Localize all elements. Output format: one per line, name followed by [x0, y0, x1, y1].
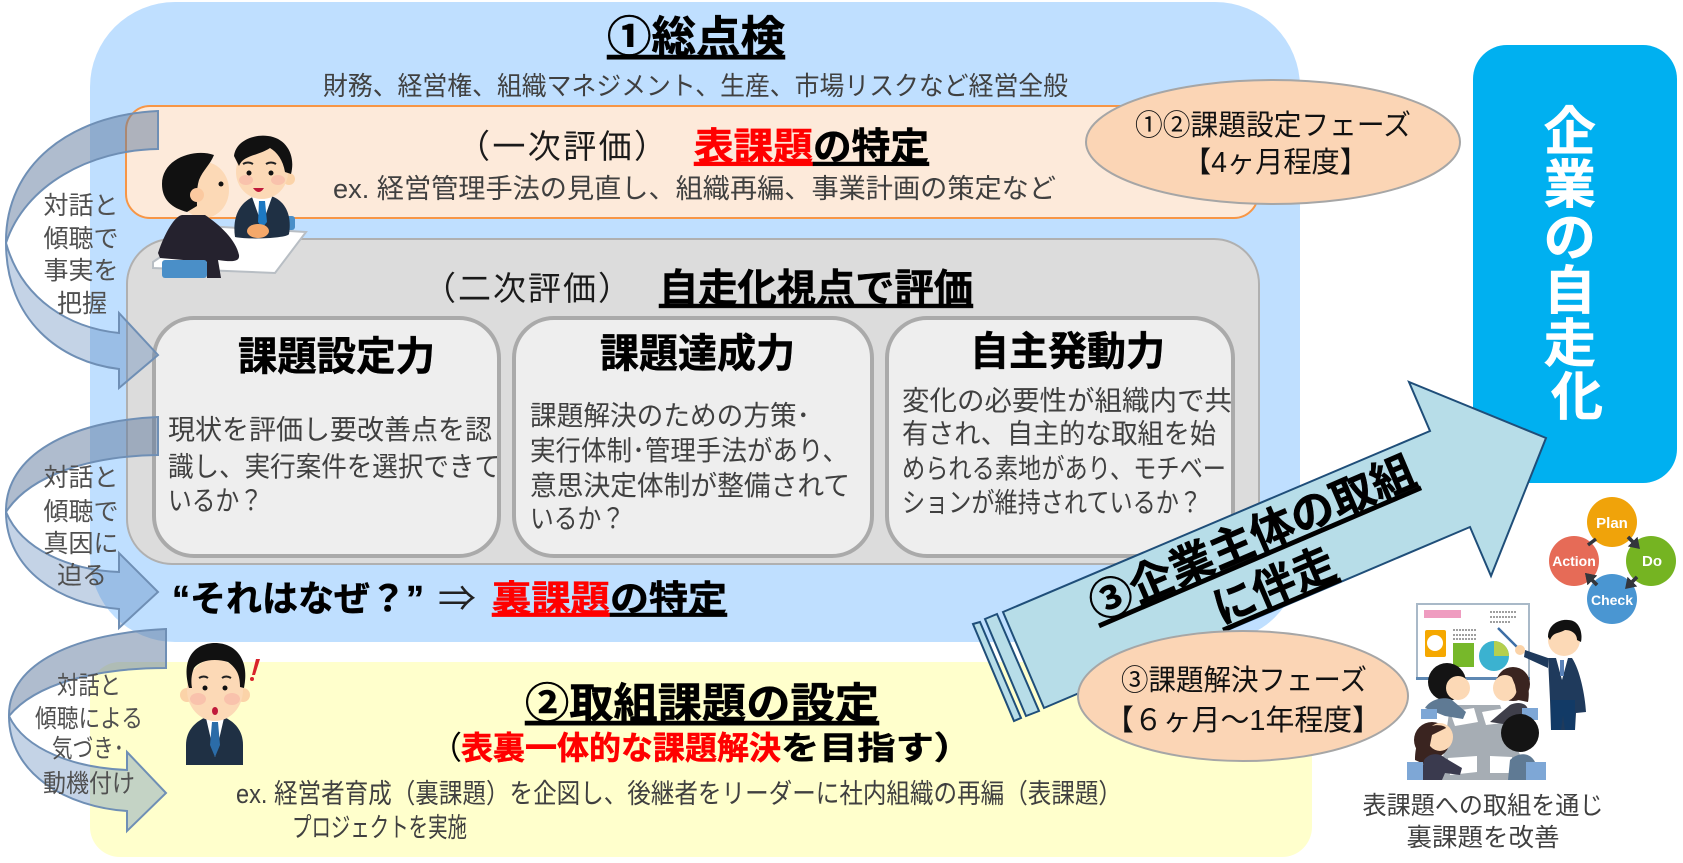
card body: 実行体制･管理手法があり、 — [530, 435, 848, 466]
goal text: 企 — [1544, 104, 1596, 162]
arrow label — [35, 672, 143, 798]
illustration: surprised businessman — [180, 643, 260, 765]
arrow label: 把握 — [57, 290, 107, 318]
card: 自主発動力 — [887, 318, 1233, 556]
example text: プロジェクトを実施 — [292, 813, 467, 843]
arrow text: ③企業主体の取組 — [1082, 447, 1423, 630]
goal text: 走 — [1544, 316, 1596, 374]
big arrow: 企業主体の取組に伴走 — [973, 382, 1546, 721]
heading: それはなぜ？ 裏課題の特定 — [172, 578, 727, 619]
card title: 自主発動力 — [970, 330, 1165, 374]
label: 二次評価: （二次評価） — [423, 270, 631, 307]
heading: それはなぜ？ 裏課題の特定: ⇒ — [438, 578, 476, 619]
card body: 現状を評価し要改善点を認 — [168, 414, 492, 445]
illustration: PDCA cycle: Check — [1591, 592, 1633, 608]
subheading: 表裏一体的な課題解決: （ — [430, 730, 462, 766]
heading: それはなぜ？ 裏課題の特定: “それはなぜ？” — [172, 578, 424, 619]
arrow: 対話と傾聴で事実を把握 — [6, 111, 158, 388]
label: 一次評価: （一次評価） — [457, 128, 667, 165]
subheading: 表裏一体的な課題解決: 表裏一体的な課題解決 — [461, 730, 781, 766]
arrow label: 傾聴で — [43, 498, 119, 526]
illustration: PDCA cycle — [1549, 497, 1676, 624]
callout: 課題設定フェーズ — [1086, 80, 1460, 204]
caption: 表課題への取組を通じ裏課題を改善: 裏課題を改善 — [1406, 824, 1560, 852]
arrow label — [43, 192, 119, 318]
card body: 識し、実行案件を選択できて — [168, 451, 500, 482]
goal tile: 企業の自走化 — [1473, 45, 1677, 483]
card body — [168, 414, 500, 516]
card: 課題設定力 — [154, 318, 500, 556]
panel: 総点検 — [90, 2, 1300, 642]
card title: 課題設定力 — [238, 335, 435, 379]
illustration: PDCA cycle: Plan — [1596, 515, 1628, 532]
callout: 課題設定フェーズ: ①②課題設定フェーズ — [1135, 109, 1411, 142]
heading: 表課題の特定 — [694, 127, 929, 169]
card body — [902, 385, 1232, 518]
example text: ex. 経営管理手法の見直し、組織再編、事業計画の策定など — [333, 174, 1056, 204]
goal text: 自 — [1544, 263, 1596, 321]
heading: それはなぜ？ 裏課題の特定: の特定 — [610, 578, 727, 619]
arrow label: 動機付け — [43, 770, 135, 798]
arrow: 対話と傾聴で真因に迫る — [6, 417, 158, 628]
card body: いるか？ — [168, 485, 263, 516]
callout: 課題解決フェーズ: ③課題解決フェーズ — [1121, 664, 1367, 697]
arrow label: 対話と — [57, 672, 121, 700]
heading: 自走化視点で評価: 自走化視点で評価 — [659, 268, 973, 311]
heading: 表課題の特定: 表課題 — [694, 127, 813, 169]
card: 課題達成力 — [514, 318, 872, 556]
heading: 表課題の特定: の特定 — [813, 127, 929, 169]
heading: ②取組課題の設定: ②取組課題の設定 — [525, 680, 879, 727]
arrow label: 迫る — [57, 562, 107, 590]
card body: 意思決定体制が整備されて — [530, 470, 850, 501]
arrow label: 事実を — [43, 257, 119, 285]
callout: 課題解決フェーズ: 【６ヶ月～1年程度】 — [1105, 704, 1381, 737]
example text — [236, 779, 1122, 843]
subheading: 表裏一体的な課題解決 — [430, 730, 972, 766]
arrow label: 対話と — [43, 192, 119, 220]
caption: 表課題への取組を通じ裏課題を改善: 表課題への取組を通じ — [1362, 792, 1604, 820]
card body: いるか？ — [530, 503, 625, 534]
card body: 有され、自主的な取組を始 — [902, 418, 1216, 449]
arrow: 対話と傾聴による気づき・動機付け — [9, 629, 166, 831]
card body: められる素地があり、モチベー — [902, 453, 1226, 484]
caption: 表課題への取組を通じ裏課題を改善 — [1362, 792, 1604, 852]
card body: ションが維持されているか？ — [902, 487, 1202, 518]
card body: 課題解決のための方策･ — [530, 400, 810, 431]
illustration: PDCA cycle: Action — [1552, 553, 1596, 569]
subtitle: scope of review: 財務、経営権、組織マネジメント、生産、市場リスクなど経営全般 — [323, 71, 1068, 101]
arrow text: に伴走 — [1206, 539, 1343, 634]
arrow label: 気づき･ — [52, 735, 124, 763]
illustration: PDCA cycle: Do — [1642, 553, 1662, 570]
goal text: の — [1544, 210, 1596, 268]
arrow label: 真因に — [43, 530, 119, 558]
callout: 課題解決フェーズ — [1078, 631, 1408, 761]
callout: 課題設定フェーズ: 【4ヶ月程度】 — [1183, 146, 1368, 179]
panel: 一次評価 — [126, 106, 1258, 218]
card body — [530, 400, 850, 534]
arrow label — [43, 464, 119, 590]
heading: ①総点検: ①総点検 — [607, 14, 785, 62]
heading: それはなぜ？ 裏課題の特定: 裏課題 — [492, 578, 610, 619]
arrow label: 傾聴による — [35, 705, 143, 733]
panel: 取組課題の設定 — [90, 662, 1312, 857]
goal text: 化 — [1551, 369, 1603, 427]
card title: 課題達成力 — [600, 332, 795, 376]
panel: 二次評価 — [127, 239, 1259, 564]
goal text: 業 — [1544, 157, 1596, 215]
arrow label: 対話と — [43, 464, 119, 492]
illustration: presentation meeting — [1407, 604, 1586, 780]
example text: ex. 経営者育成（裏課題）を企図し、後継者をリーダーに社内組織の再編（表課題） — [236, 779, 1122, 809]
card body: 変化の必要性が組織内で共 — [902, 385, 1232, 416]
illustration: meeting of two people — [153, 136, 306, 278]
arrow label: 傾聴で — [43, 225, 119, 253]
subheading: 表裏一体的な課題解決: を目指す） — [781, 730, 972, 766]
